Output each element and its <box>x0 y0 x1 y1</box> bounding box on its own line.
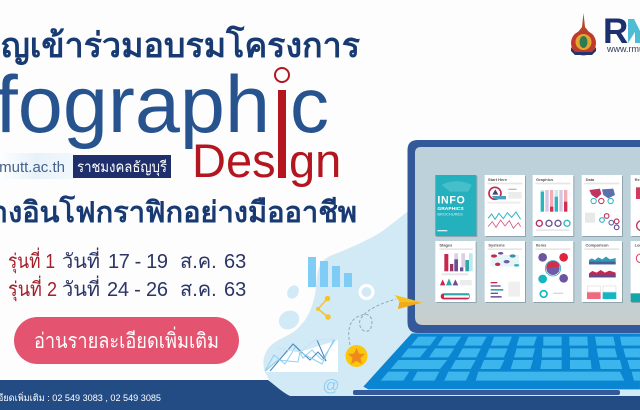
icon: star coin <box>346 345 368 367</box>
page: stages: Stages <box>439 243 453 248</box>
schedule line 1: 17 - 19 <box>108 251 168 273</box>
page: cover <box>435 175 477 237</box>
university label: ราชมงคลธัญบุรี <box>77 159 167 177</box>
icon: red letter i dot <box>275 68 289 82</box>
laptop <box>353 140 640 395</box>
heading: Infographic <box>0 60 329 178</box>
schedule line 2: ส.ค. <box>180 279 217 301</box>
decorative ellipses <box>275 283 303 333</box>
page: maps <box>582 175 623 237</box>
page: comparison <box>582 241 623 303</box>
schedule line 2 <box>8 275 246 302</box>
page: right column bottom <box>631 241 640 303</box>
button: read more: อ่านรายละเอียดเพิ่มเติม <box>34 326 219 353</box>
page: stages <box>435 241 477 303</box>
heading: Infographic: c <box>290 61 329 149</box>
schedule line 2: 63 <box>224 279 246 301</box>
heading: Design: Des <box>192 134 276 187</box>
schedule line 1: วันที่ <box>62 247 100 273</box>
page: maps: Data <box>586 177 595 182</box>
page: cover: GRAPHICS <box>437 206 464 212</box>
laptop keyboard <box>363 333 640 389</box>
ring icon <box>360 286 373 298</box>
line chart <box>265 339 338 372</box>
icon: at sign: @ <box>322 376 340 395</box>
dashed flight path <box>349 299 396 345</box>
page: systems <box>485 241 526 303</box>
schedule line 2: รุ่นที่ 2 <box>8 275 57 302</box>
schedule line 1 <box>8 247 246 274</box>
schedule line 1: ส.ค. <box>180 251 217 273</box>
logo: RMUTT wordmark: R <box>603 12 628 51</box>
icon: paper plane <box>395 295 422 309</box>
heading: Design: gn <box>289 134 341 187</box>
page: graphics: Graphics <box>536 177 554 182</box>
button: read more <box>14 317 239 364</box>
icon: share <box>317 296 330 319</box>
bar chart icon <box>308 257 352 287</box>
schedule line 2: วันที่ <box>62 275 100 301</box>
laptop screen <box>415 147 640 325</box>
page: comparison: Comparison <box>585 243 609 248</box>
page: graphics <box>533 175 574 237</box>
page: items <box>533 241 574 303</box>
icon: red letter i stem <box>278 90 286 178</box>
laptop screen frame <box>408 140 640 333</box>
schedule line 2: 24 - 26 <box>107 279 168 301</box>
page: start here: Start Here <box>488 177 508 182</box>
schedule line 1: รุ่นที่ 1 <box>8 247 55 274</box>
schedule line 1: 63 <box>224 251 246 273</box>
website pill <box>0 153 76 179</box>
light blue blob background <box>263 212 640 400</box>
document thumbnails <box>435 175 640 303</box>
page: start here <box>485 175 526 237</box>
page: right column top <box>631 175 640 237</box>
page: cover: BROCHURES <box>437 211 463 216</box>
page: cover: INFO <box>437 194 465 206</box>
page: items: Items <box>536 243 547 248</box>
logo: RMUTT wordmark <box>603 12 640 54</box>
laptop base <box>353 390 620 395</box>
footer bar <box>0 380 640 410</box>
university label <box>73 155 171 178</box>
page: systems: Systems <box>488 243 505 248</box>
logo: emblem <box>571 13 596 56</box>
